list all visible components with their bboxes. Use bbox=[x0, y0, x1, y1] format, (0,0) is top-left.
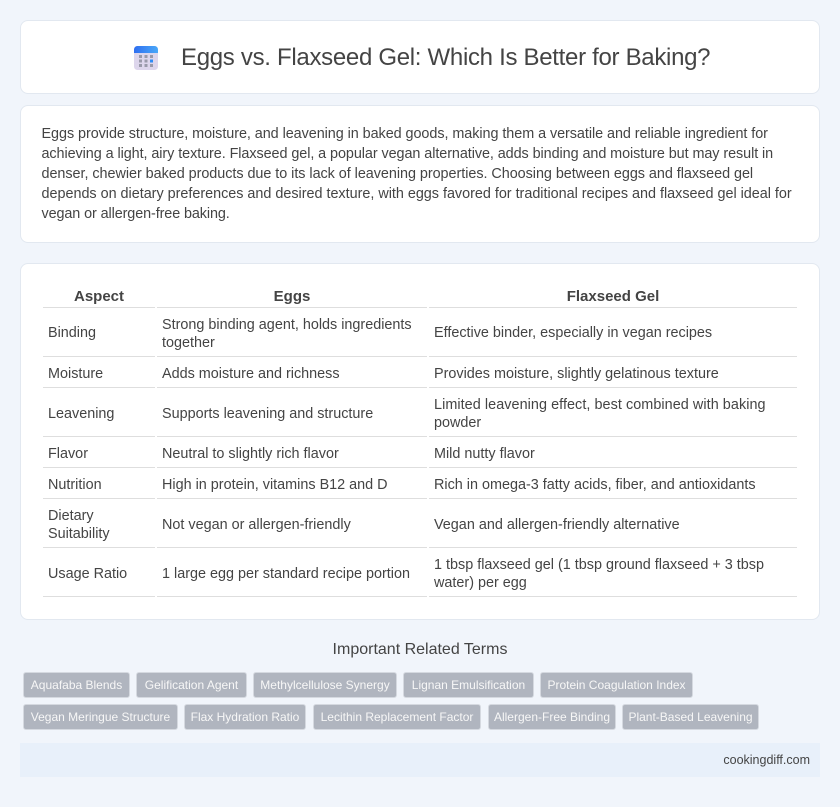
row: leavening: Leavening bbox=[48, 406, 114, 422]
panel: introduction text bbox=[20, 105, 820, 243]
tag group row 1: Methylcellulose Synergy bbox=[260, 678, 390, 692]
icon: calendar bbox=[134, 46, 158, 70]
panel: comparison table bbox=[20, 263, 820, 620]
panel: introduction text: vegan or allergen-free baking. bbox=[42, 206, 230, 222]
row: flavor: Flavor bbox=[48, 446, 88, 462]
heading: important related terms: Important Related Terms bbox=[333, 641, 507, 658]
row: leavening: Limited leavening effect, best combined with baking bbox=[434, 397, 766, 413]
footer bar bbox=[20, 743, 820, 777]
row: nutrition: Nutrition bbox=[48, 477, 102, 493]
tag group row 2: Flax Hydration Ratio bbox=[191, 710, 299, 724]
panel: introduction text: depends on dietary preferences and desired texture, with eggs favored for traditional recipes and flaxseed gel ideal for bbox=[42, 186, 792, 202]
row: dietary suitability bbox=[48, 508, 680, 542]
header panel bbox=[20, 20, 820, 94]
tag group row 2: Lecithin Replacement Factor bbox=[321, 710, 473, 724]
row: usage ratio: water) per egg bbox=[434, 575, 527, 591]
tag group row 2: Allergen-Free Binding bbox=[494, 710, 610, 724]
table header: Flaxseed Gel bbox=[567, 288, 659, 305]
row: leavening bbox=[48, 397, 766, 431]
row: binding bbox=[48, 317, 712, 351]
row: nutrition bbox=[48, 477, 756, 493]
tag group row 1 bbox=[23, 672, 693, 698]
table header: Aspect bbox=[74, 288, 124, 305]
table header: Eggs bbox=[274, 288, 310, 305]
title: Eggs vs. Flaxseed Gel: Which Is Better for Baking? bbox=[181, 44, 710, 71]
row: usage ratio: Usage Ratio bbox=[48, 566, 127, 582]
row: usage ratio: 1 large egg per standard recipe portion bbox=[162, 566, 410, 582]
row: usage ratio bbox=[48, 557, 764, 591]
row: dietary suitability: Not vegan or allergen-friendly bbox=[162, 517, 351, 533]
panel: introduction text: denser, chewier baked products due to its lack of leavening properties. Choosing between eggs and flaxseed gel bbox=[42, 166, 753, 182]
row: binding: Binding bbox=[48, 325, 96, 341]
row: moisture: Provides moisture, slightly gelatinous texture bbox=[434, 366, 719, 382]
table header bbox=[74, 288, 659, 305]
row: usage ratio: 1 tbsp flaxseed gel (1 tbsp ground flaxseed + 3 tbsp bbox=[434, 557, 764, 573]
row: nutrition: Rich in omega-3 fatty acids, fiber, and antioxidants bbox=[434, 477, 756, 493]
tag group row 2: Vegan Meringue Structure bbox=[31, 710, 170, 724]
panel: introduction text: Eggs provide structure, moisture, and leavening in baked goods, making them a versatile and reliable ingredient for bbox=[42, 126, 768, 142]
row: moisture: Moisture bbox=[48, 366, 103, 382]
tag group row 1: Gelification Agent bbox=[145, 678, 238, 692]
row: flavor: Mild nutty flavor bbox=[434, 446, 535, 462]
panel: introduction text: achieving a light, airy texture. Flaxseed gel, a popular vegan alternative, adds binding and moisture but may result in bbox=[42, 146, 773, 162]
row: moisture bbox=[48, 366, 719, 382]
row: binding: together bbox=[162, 335, 215, 351]
row: binding: Effective binder, especially in vegan recipes bbox=[434, 325, 712, 341]
row: leavening: Supports leavening and structure bbox=[162, 406, 373, 422]
row: flavor: Neutral to slightly rich flavor bbox=[162, 446, 339, 462]
tag group row 2 bbox=[23, 704, 759, 730]
row: leavening: powder bbox=[434, 415, 481, 431]
row: flavor bbox=[48, 446, 535, 462]
row: dietary suitability: Dietary bbox=[48, 508, 94, 524]
row: dietary suitability: Vegan and allergen-friendly alternative bbox=[434, 517, 680, 533]
tag group row 1: Protein Coagulation Index bbox=[547, 678, 686, 692]
row: binding: Strong binding agent, holds ingredients bbox=[162, 317, 412, 333]
footer site name: cookingdiff.com bbox=[723, 753, 810, 767]
row: dietary suitability: Suitability bbox=[48, 526, 110, 542]
tag group row 2: Plant-Based Leavening bbox=[628, 710, 753, 724]
tag group row 1: Aquafaba Blends bbox=[31, 678, 122, 692]
row: moisture: Adds moisture and richness bbox=[162, 366, 340, 382]
row: nutrition: High in protein, vitamins B12 and D bbox=[162, 477, 388, 493]
tag group row 1: Lignan Emulsification bbox=[412, 678, 525, 692]
